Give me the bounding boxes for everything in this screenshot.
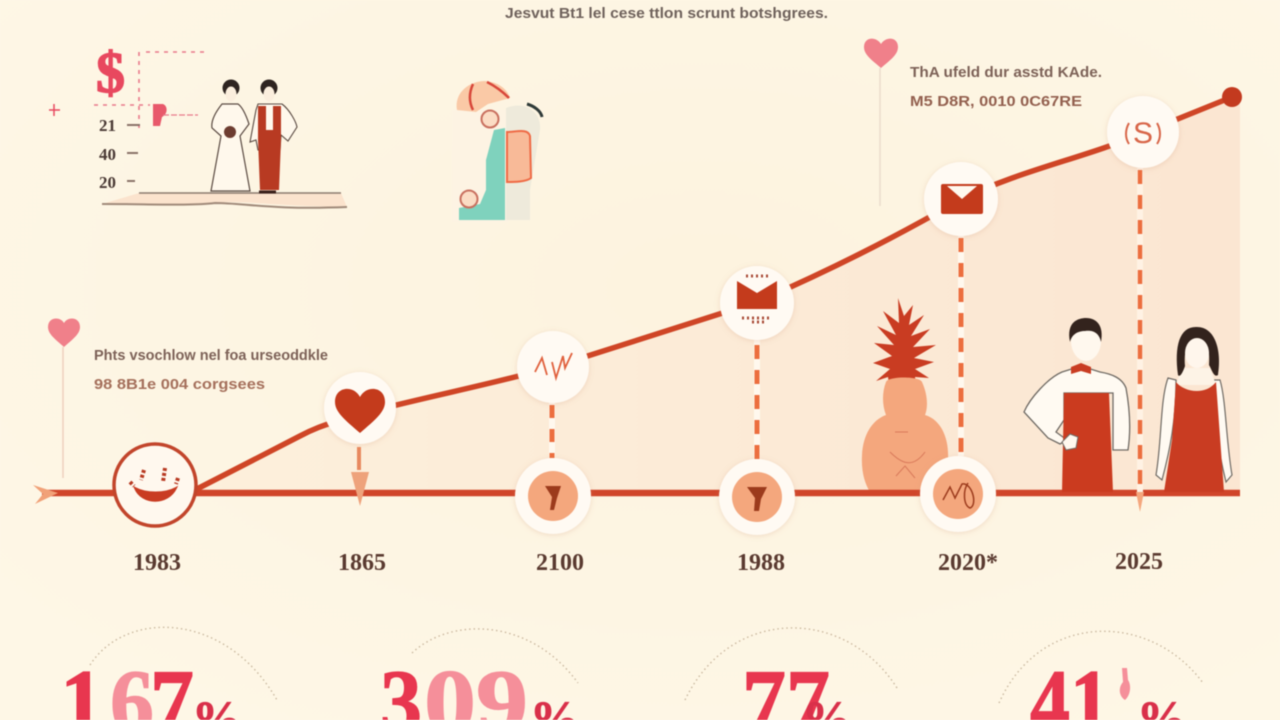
man figure [1024, 318, 1130, 492]
year labels: 2025 [1115, 549, 1163, 575]
callout: left note [48, 318, 328, 478]
illustration: abstract teal and peach figure [452, 81, 542, 222]
dollar sign: $ [96, 40, 125, 105]
stat: fourth percentage [999, 631, 1203, 720]
callout: right note: M5 D8R, 0010 0C67RE [910, 94, 1082, 110]
dashed connector 2020 [958, 232, 964, 456]
icon: heart [864, 39, 898, 68]
start arrow [33, 485, 58, 504]
heading: Jesvut Bt1 lel cese ttlon scrunt botshgrees. [505, 6, 828, 22]
year labels: 1983 [133, 550, 181, 576]
callout: right note: ThA ufeld dur asstd KAde. [910, 65, 1102, 81]
year labels [133, 549, 1163, 576]
node: book [720, 266, 794, 340]
callout: left note: 98 8B1e 004 corgsees [94, 377, 265, 393]
red mini label [153, 104, 198, 126]
teal shape [459, 128, 505, 220]
area under growth line [195, 97, 1240, 490]
bride [211, 80, 250, 191]
woman figure [1156, 327, 1232, 492]
orange shape [507, 131, 531, 182]
pineapple illustration [862, 298, 948, 492]
scale numbers: 20 [99, 173, 116, 192]
dashed connector 2025 [1136, 165, 1144, 512]
stat: second percentage [380, 629, 580, 720]
node: envelope [924, 162, 998, 236]
node: peach 2000s [515, 458, 591, 534]
ground [102, 193, 347, 207]
groom [250, 80, 297, 192]
scale numbers: 21 [99, 116, 116, 135]
rings [482, 110, 498, 128]
scale numbers: 40 [99, 145, 116, 164]
year labels: 2020* [938, 550, 998, 576]
stat: third percentage [685, 628, 897, 720]
small plus marker [49, 104, 60, 116]
growth line [195, 97, 1232, 490]
dashed connector 2000s [549, 400, 555, 460]
node: dollar: S [1133, 117, 1153, 150]
stat: first percentage [60, 627, 277, 720]
dashed connector 1988 [754, 336, 760, 462]
year labels: 1865 [338, 550, 386, 576]
node: start smile [114, 444, 196, 526]
peach shape [457, 81, 510, 112]
callout: left note: Phts vsochlow nel foa urseoddkle [94, 348, 328, 364]
node: dollar [1107, 96, 1179, 168]
icon: heart [48, 318, 80, 347]
callout: right note [864, 39, 1102, 206]
year labels: 1988 [737, 550, 785, 576]
baseline axis [42, 490, 1240, 496]
year labels: 2100 [536, 550, 584, 576]
end point [1222, 87, 1242, 107]
illustration: wedding couple with cost scale [49, 40, 347, 208]
marker: downward arrow [351, 447, 369, 506]
node: squiggle [517, 331, 589, 403]
node: peach 2020 [920, 456, 996, 532]
node: peach 1988 [719, 459, 795, 535]
dark arc [527, 104, 542, 117]
node: heart [324, 372, 396, 444]
scale numbers [99, 116, 116, 192]
